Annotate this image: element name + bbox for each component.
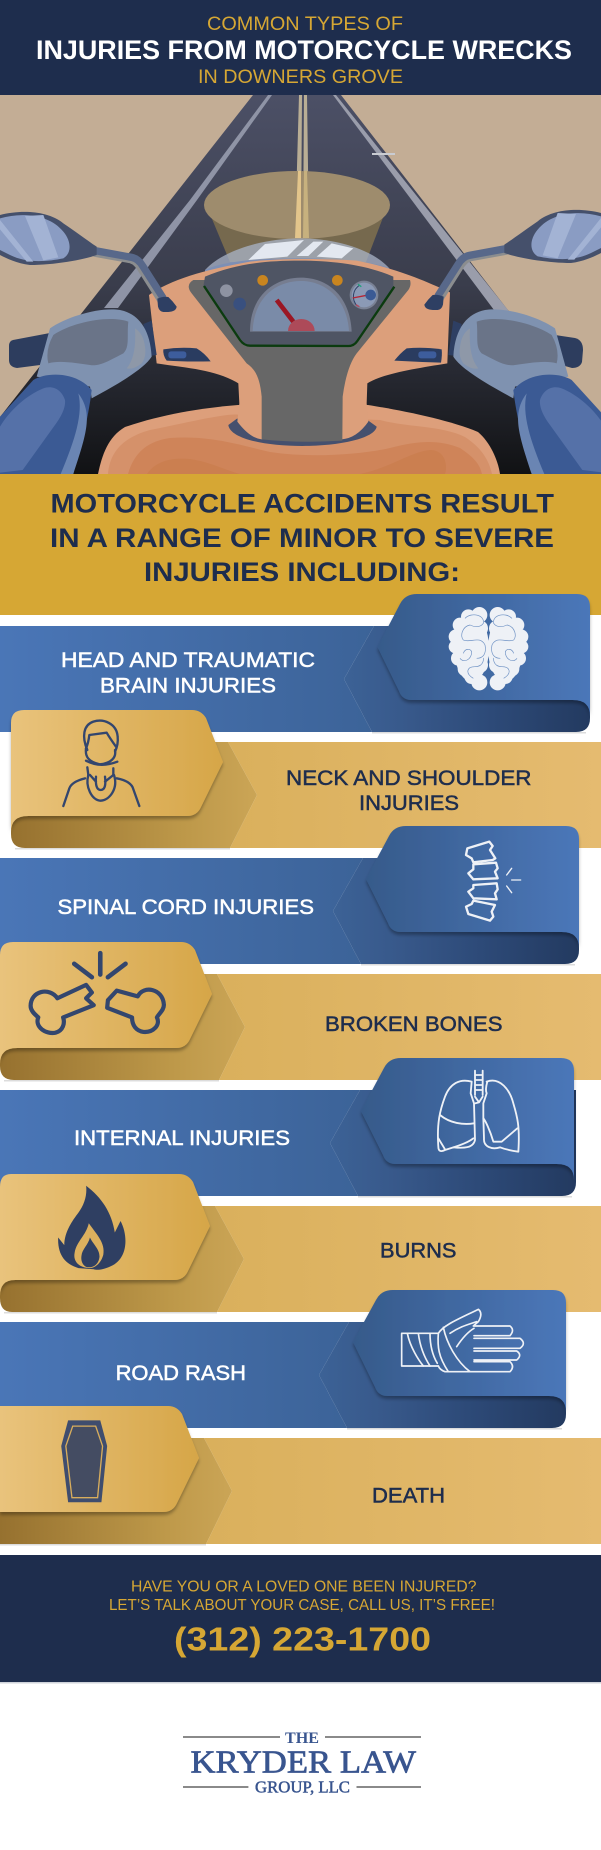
left lane line	[104, 95, 272, 308]
icon: bandaged hand	[402, 1309, 523, 1372]
headlight beam	[204, 171, 390, 262]
lower body of motorcycle	[98, 405, 500, 474]
icon: brain	[449, 607, 528, 690]
headline line 2: IN A RANGE OF MINOR TO SEVERE	[50, 523, 554, 553]
icon: neck brace	[63, 721, 139, 806]
ribbon: death	[0, 1406, 601, 1546]
ribbon: spinal cord injuries	[0, 826, 579, 966]
ribbon: road rash	[0, 1290, 566, 1430]
label	[61, 649, 315, 697]
right lane line	[333, 95, 508, 316]
left brake lever bar	[9, 333, 50, 368]
ribbon: broken bones	[0, 942, 601, 1082]
call to action panel	[0, 1555, 601, 1684]
speedometer	[250, 278, 352, 332]
logo: The Kryder Law Group: GROUP, LLC	[255, 1778, 350, 1797]
right hand grip and sleeve	[448, 309, 601, 474]
instrument panel	[203, 261, 393, 345]
title line 2: INJURIES FROM MOTORCYCLE WRECKS	[36, 35, 572, 65]
label: BROKEN BONES	[325, 1013, 502, 1036]
grey centre stem	[189, 280, 411, 442]
call to action line 1: HAVE YOU OR A LOVED ONE BEEN INJURED?	[131, 1579, 477, 1596]
collar ring	[228, 418, 377, 446]
phone number: (312) 223-1700	[174, 1620, 431, 1658]
green panel trim	[204, 286, 394, 346]
illustration: motorcycle rider view	[0, 95, 601, 474]
headline line 1: MOTORCYCLE ACCIDENTS RESULT	[50, 488, 555, 518]
fuel gauge	[350, 281, 378, 309]
icon: lungs	[438, 1071, 519, 1152]
right mirror and stalk	[424, 210, 601, 310]
label: INTERNAL INJURIES	[74, 1127, 290, 1150]
ribbon: burns	[0, 1174, 601, 1314]
logo: The Kryder Law Group: KRYDER LAW	[190, 1744, 417, 1780]
ribbon: head and traumatic brain injuries	[0, 594, 590, 734]
indicator lights	[220, 275, 343, 310]
label: DEATH	[372, 1484, 445, 1507]
road tick mark	[372, 153, 395, 155]
logo: The Kryder Law Group	[183, 1730, 421, 1797]
label: HEAD AND TRAUMATIC	[61, 649, 315, 672]
title line 3: IN DOWNERS GROVE	[198, 66, 403, 88]
label: BRAIN INJURIES	[100, 674, 276, 697]
icon: flame	[58, 1186, 125, 1270]
logo: The Kryder Law Group: THE	[285, 1730, 319, 1747]
label	[286, 767, 532, 815]
road	[0, 95, 601, 474]
label: BURNS	[380, 1240, 456, 1263]
left hand grip and sleeve	[0, 309, 157, 474]
right brake lever bar	[555, 335, 583, 368]
left mirror and stalk	[0, 212, 177, 312]
orange console	[149, 259, 450, 439]
right switch	[394, 348, 442, 363]
windshield	[205, 238, 389, 277]
call to action line 2: LET’S TALK ABOUT YOUR CASE, CALL US, IT’S FREE!	[109, 1597, 495, 1614]
dashboard console	[149, 259, 450, 446]
title line 1: COMMON TYPES OF	[207, 13, 403, 35]
header banner	[0, 0, 601, 95]
center lines	[295, 95, 309, 238]
headline line 3: INJURIES INCLUDING:	[144, 557, 460, 587]
ribbon: internal injuries	[0, 1058, 576, 1198]
label: INJURIES	[359, 792, 459, 815]
icon: broken bones	[31, 953, 164, 1033]
ribbon: neck and shoulder injuries	[11, 710, 601, 850]
icon: spine	[466, 842, 521, 921]
label: ROAD RASH	[116, 1362, 246, 1385]
left switch	[163, 348, 211, 362]
label: NECK AND SHOULDER	[286, 767, 532, 790]
label: SPINAL CORD INJURIES	[58, 896, 314, 919]
gold headline panel	[0, 474, 601, 615]
icon: coffin	[61, 1420, 107, 1502]
